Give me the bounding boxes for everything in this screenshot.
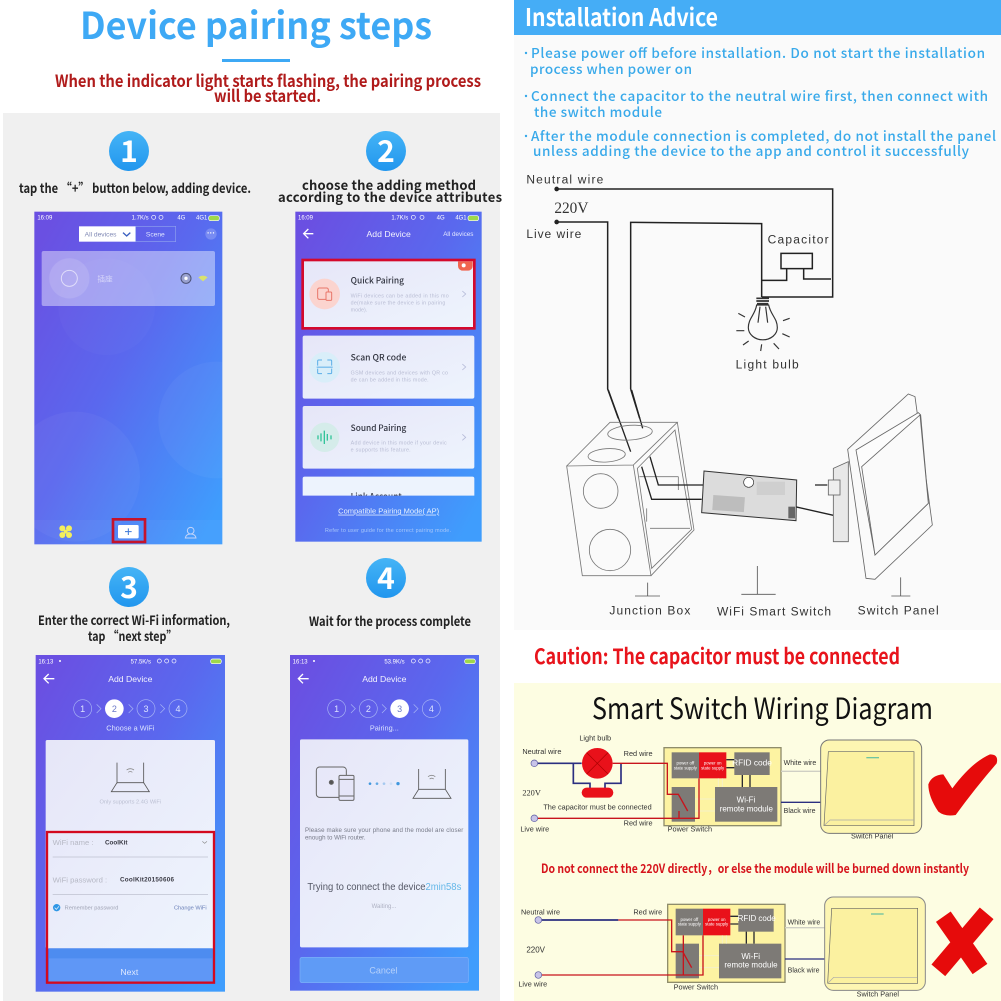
compatible pairing link: Compatible Pairing Mode( AP) bbox=[338, 507, 440, 516]
red intro note: will be started. bbox=[214, 83, 321, 107]
correct wiring diagram: Switch Panel bbox=[851, 831, 894, 840]
red intro note: When the indicator light starts flashing, the pairing process bbox=[55, 68, 481, 92]
wifi form: CoolKit bbox=[105, 839, 128, 846]
card: scan QR code bbox=[303, 336, 474, 399]
step 3 caption: Enter the correct Wi-Fi information, bbox=[38, 610, 230, 629]
step progress: 2 bbox=[366, 704, 371, 714]
wrong wiring diagram: Red wire bbox=[633, 907, 662, 916]
phone: pairing progress bbox=[290, 655, 479, 991]
junction box bbox=[567, 422, 694, 576]
wrong wiring diagram: Black wire bbox=[788, 967, 820, 974]
correct wiring diagram: power off bbox=[676, 760, 695, 765]
wiring schematic: Live wire bbox=[526, 227, 582, 241]
correct wiring diagram: The capacitor must be connected bbox=[543, 802, 652, 811]
phone: device list bbox=[34, 212, 222, 544]
wifi form: Remember password bbox=[65, 906, 118, 912]
phone: add device methods: All devices bbox=[443, 231, 473, 238]
wifi form: WiFi name : bbox=[53, 838, 94, 847]
wrong wiring diagram: 220V bbox=[526, 945, 546, 954]
phone: pairing progress: 16:13 bbox=[293, 659, 308, 665]
phone: choose wifi: Choose a WiFi bbox=[106, 723, 155, 732]
step progress: 4 bbox=[429, 704, 434, 714]
diagram title: Smart Switch Wiring Diagram bbox=[592, 686, 933, 728]
phone: pairing progress: Pairing... bbox=[370, 723, 399, 732]
wrong wiring diagram: RFID code bbox=[738, 914, 776, 923]
icon: check mark bbox=[928, 754, 997, 816]
phone: add device methods: 1.7K/s bbox=[391, 215, 408, 221]
red intro note bbox=[55, 68, 481, 107]
step 3 caption: tap “next step” bbox=[88, 626, 177, 645]
card: link account partial: Link Account bbox=[351, 490, 402, 502]
wiring schematic: 220V bbox=[554, 200, 588, 217]
switch panel bbox=[825, 897, 925, 990]
card: quick pairing bbox=[303, 260, 474, 328]
phone: add device methods: 16:09 bbox=[298, 215, 314, 221]
phone: device list: ··· bbox=[207, 228, 215, 237]
card: quick pairing: de(make sure the device is in pairing bbox=[351, 300, 445, 306]
advice text: unless adding the device to the app and control it successfully bbox=[533, 140, 970, 160]
correct wiring diagram: state supply bbox=[701, 765, 725, 770]
wifi module bbox=[702, 471, 797, 521]
wifi form bbox=[53, 838, 208, 912]
wifi form: WiFi password : bbox=[53, 875, 107, 884]
wrong wiring diagram: state supply bbox=[678, 922, 702, 927]
correct wiring diagram: Black wire bbox=[784, 808, 816, 815]
phone: device list: 4G bbox=[177, 215, 186, 221]
correct wiring diagram bbox=[520, 733, 997, 840]
step 2 caption bbox=[278, 175, 502, 206]
advice text: process when power on bbox=[530, 58, 692, 78]
phone: device list: Scene bbox=[146, 232, 165, 239]
caution heading: Caution: The capacitor must be connected bbox=[534, 641, 900, 671]
correct wiring diagram: 220V bbox=[522, 789, 541, 798]
device card bbox=[42, 251, 215, 306]
device card: 插座 bbox=[97, 273, 113, 283]
correct wiring diagram: power on bbox=[704, 760, 722, 765]
step 4 caption: Wait for the process complete bbox=[309, 611, 471, 630]
correct wiring diagram: remote module bbox=[720, 805, 774, 814]
wrong wiring diagram bbox=[518, 897, 987, 999]
phone: add device methods: 4G1 bbox=[455, 215, 467, 221]
advice text: Connect the capacitor to the neutral wire first, then connect with bbox=[531, 85, 988, 105]
phone: add device methods bbox=[295, 212, 482, 542]
card: sound pairing bbox=[303, 406, 474, 469]
card: sound pairing: e supports this feature. bbox=[351, 448, 411, 454]
panel: wiring diagrams bbox=[514, 683, 1001, 1001]
wrong wiring diagram: power off bbox=[680, 917, 699, 922]
step 2 badge: 2 bbox=[377, 127, 395, 171]
wrong wiring diagram: power on bbox=[708, 917, 726, 922]
step 1 badge: 1 bbox=[120, 127, 138, 171]
correct wiring diagram: state supply bbox=[674, 765, 698, 770]
step 3 badge bbox=[109, 563, 149, 607]
step progress bbox=[74, 699, 187, 718]
correct wiring diagram: Light bulb bbox=[579, 733, 611, 742]
wiring schematic: Light bulb bbox=[736, 358, 799, 372]
icon: device and phone bbox=[316, 767, 354, 800]
advice text: Please power off before installation. Do not start the installation bbox=[531, 42, 985, 62]
phone: choose wifi: Only supports 2.4G WiFi bbox=[100, 799, 161, 805]
icon: bulb bbox=[582, 748, 613, 779]
correct wiring diagram: Live wire bbox=[520, 824, 549, 833]
card: link account partial bbox=[302, 476, 474, 496]
exploded installation bbox=[567, 390, 939, 618]
wrong wiring diagram: Power Switch bbox=[674, 983, 718, 992]
step progress: 2 bbox=[112, 704, 117, 714]
correct wiring diagram: Neutral wire bbox=[522, 747, 561, 756]
icon: capacitor bbox=[582, 788, 613, 798]
phone: pairing progress: enough to WiFi router. bbox=[305, 835, 366, 842]
cancel button bbox=[300, 957, 468, 983]
icon: light bulb bbox=[736, 298, 790, 351]
step 1 badge bbox=[109, 127, 149, 171]
phone: choose wifi bbox=[36, 655, 225, 992]
wrong wiring diagram: Wi-Fi bbox=[741, 952, 760, 961]
icon: profile bbox=[185, 527, 196, 538]
panel: installation advice bbox=[514, 0, 1001, 630]
advice text bbox=[525, 42, 996, 160]
step 3 caption bbox=[38, 610, 230, 645]
icon: add button bbox=[113, 519, 145, 542]
step 1 caption: tap the “+” button below, adding device. bbox=[19, 178, 251, 197]
card: quick pairing: Quick Pairing bbox=[351, 275, 404, 287]
card: quick pairing: mode). bbox=[351, 308, 367, 314]
step progress: 1 bbox=[80, 704, 85, 714]
correct wiring diagram: RFID code bbox=[732, 758, 772, 768]
switch panel bbox=[821, 740, 922, 833]
cancel button: Cancel bbox=[369, 966, 397, 976]
wrong wiring diagram: White wire bbox=[788, 919, 820, 926]
wrong wiring diagram: state supply bbox=[705, 922, 729, 927]
panel: pairing steps bbox=[3, 113, 502, 1001]
card: quick pairing: WiFi devices can be added in this mo bbox=[351, 293, 449, 299]
step progress: 3 bbox=[397, 704, 402, 714]
exploded installation: Junction Box bbox=[609, 604, 690, 618]
phone: device list: 1.7K/s bbox=[132, 215, 149, 221]
phone: pairing progress: 53.9K/s bbox=[384, 659, 405, 665]
wifi form: Change WiFi bbox=[174, 906, 207, 912]
icon: home flower bbox=[59, 525, 72, 538]
wrong wiring diagram: Neutral wire bbox=[521, 907, 560, 916]
step progress: 3 bbox=[143, 704, 148, 714]
phone: add device methods: Refer to user guide for the correct pairing mode. bbox=[325, 528, 451, 534]
correct wiring diagram: Power Switch bbox=[668, 824, 712, 833]
correct wiring diagram: White wire bbox=[784, 760, 816, 767]
icon: router bbox=[413, 769, 451, 798]
step 2 caption: according to the device attributes bbox=[278, 187, 502, 206]
phone: add device methods: Add Device bbox=[367, 229, 411, 239]
advice text: the switch module bbox=[534, 101, 662, 121]
highlight frame bbox=[47, 832, 214, 983]
icon: router bbox=[111, 763, 149, 792]
connection countdown: Trying to connect the device2min58s bbox=[307, 882, 461, 893]
correct wiring diagram: Red wire bbox=[624, 749, 653, 758]
wrong wiring diagram: Live wire bbox=[518, 980, 547, 989]
card: scan QR code: de can be added in this mode. bbox=[351, 377, 429, 383]
step 4 badge: 4 bbox=[377, 554, 395, 598]
phone: pairing progress: Waiting... bbox=[372, 904, 397, 910]
next button: Next bbox=[120, 967, 139, 977]
card: scan QR code: Scan QR code bbox=[351, 352, 407, 364]
step progress: 4 bbox=[175, 704, 180, 714]
wiring schematic: Capacitor bbox=[768, 232, 829, 246]
correct wiring diagram: Red wire bbox=[624, 818, 653, 827]
step progress: 1 bbox=[334, 704, 339, 714]
step 3 badge: 3 bbox=[120, 563, 138, 607]
icon: cross mark bbox=[938, 913, 987, 970]
card: sound pairing: Sound Pairing bbox=[351, 422, 407, 434]
wrong wiring diagram: Switch Panel bbox=[857, 990, 899, 999]
wrong wiring diagram: remote module bbox=[724, 960, 778, 969]
wifi form: CoolKit20150606 bbox=[120, 877, 174, 884]
phone: choose wifi: 57.5K/s bbox=[131, 659, 151, 665]
phone: pairing progress: Add Device bbox=[362, 674, 407, 684]
phone: device list: 16:09 bbox=[37, 215, 53, 221]
card: sound pairing: Add device in this mode if your devic bbox=[351, 441, 447, 447]
wiring schematic bbox=[526, 172, 833, 418]
phone: add device methods: 4G bbox=[437, 215, 445, 221]
advice text: After the module connection is completed, do not install the panel bbox=[531, 125, 996, 145]
step 2 caption: choose the adding method bbox=[302, 175, 476, 194]
heading band bbox=[514, 0, 1001, 35]
phone: choose wifi: 16:13 bbox=[38, 659, 54, 665]
card: scan QR code: GSM devices and devices with QR co bbox=[351, 370, 448, 376]
switch panel bbox=[828, 394, 932, 579]
phone: pairing progress: Please make sure your phone and the model are closer bbox=[305, 827, 463, 834]
step progress bbox=[328, 699, 440, 718]
phone: device list: 4G1 bbox=[196, 215, 208, 221]
phone: device list: All devices bbox=[85, 232, 117, 239]
step 4 badge bbox=[366, 554, 406, 598]
next button bbox=[49, 948, 212, 982]
wiring schematic: Neutral wire bbox=[526, 172, 604, 186]
icon: progress dots bbox=[369, 782, 400, 785]
step 2 badge bbox=[366, 127, 406, 171]
phone: choose wifi: Add Device bbox=[108, 674, 153, 684]
exploded installation: WiFi Smart Switch bbox=[717, 604, 831, 618]
exploded installation: Switch Panel bbox=[858, 604, 939, 618]
correct wiring diagram: Wi-Fi bbox=[737, 796, 756, 805]
